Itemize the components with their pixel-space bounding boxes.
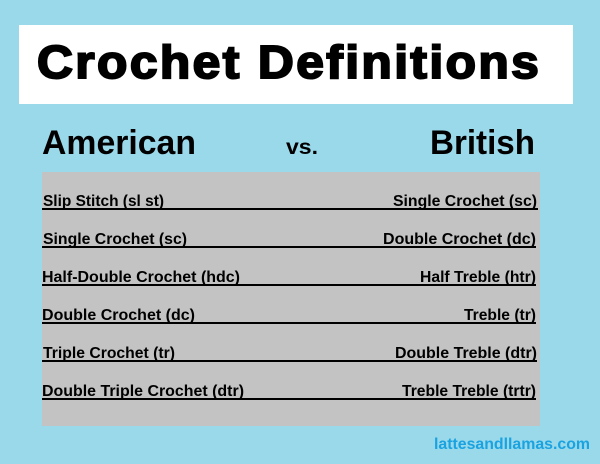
row: double triple crochet bbox=[42, 383, 536, 400]
panel: definitions table bbox=[42, 172, 540, 426]
row: single crochet: Double Crochet (dc) bbox=[383, 231, 536, 248]
row: single crochet bbox=[42, 231, 536, 248]
row: double crochet: Double Crochet (dc) bbox=[42, 307, 195, 324]
row: slip stitch: Slip Stitch (sl st) bbox=[43, 193, 164, 210]
title: Crochet Definitions bbox=[37, 36, 539, 89]
source credit: lattesandllamas.com bbox=[434, 436, 590, 453]
row: double triple crochet: Double Triple Crochet (dtr) bbox=[42, 383, 244, 400]
row: half-double crochet bbox=[42, 269, 536, 286]
row: half-double crochet: Half Treble (htr) bbox=[420, 269, 536, 286]
row: triple crochet bbox=[42, 345, 537, 362]
row: triple crochet: Double Treble (dtr) bbox=[395, 345, 537, 362]
row: slip stitch: Single Crochet (sc) bbox=[393, 193, 537, 210]
row: half-double crochet: Half-Double Crochet (hdc) bbox=[42, 269, 240, 286]
title banner bbox=[19, 25, 573, 104]
row: single crochet: Single Crochet (sc) bbox=[43, 231, 187, 248]
row: double triple crochet: Treble Treble (trtr) bbox=[402, 383, 536, 400]
row: triple crochet: Triple Crochet (tr) bbox=[43, 345, 175, 362]
heading: British: British bbox=[430, 124, 535, 162]
heading: vs.: vs. bbox=[286, 136, 318, 159]
row: double crochet bbox=[42, 307, 536, 324]
heading: American: American bbox=[42, 124, 196, 162]
row: slip stitch bbox=[42, 193, 538, 210]
row: double crochet: Treble (tr) bbox=[464, 307, 536, 324]
